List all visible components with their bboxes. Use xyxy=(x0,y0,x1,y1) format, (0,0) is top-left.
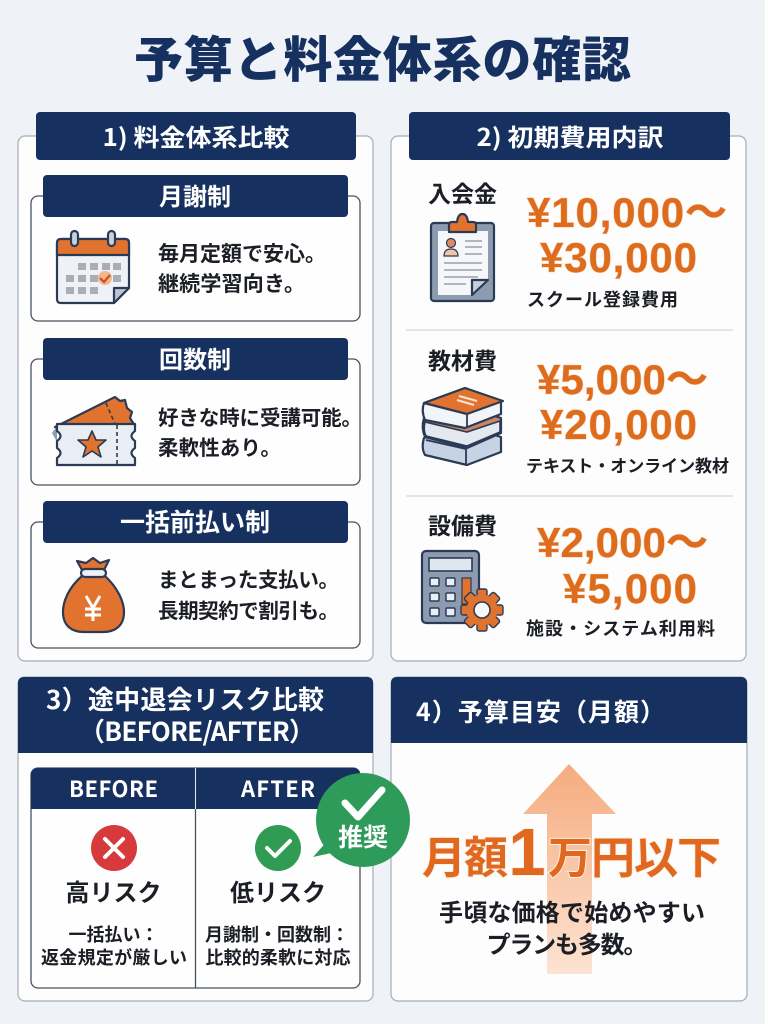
text: monthly description: 毎月定額で安心。 xyxy=(158,238,326,268)
heading: pricing comparison: 1) 料金体系比較 xyxy=(102,118,290,153)
row: equipment fee: 施設・システム利用料 xyxy=(526,615,715,641)
panel: 1 pricing comparison xyxy=(18,112,373,661)
text: per-session description: 柔軟性あり。 xyxy=(158,431,281,461)
callout: under 10,000 yen per month: 月額 xyxy=(422,822,508,886)
heading: monthly budget xyxy=(391,677,747,743)
price: equipment fee: ¥2,000～ xyxy=(537,519,708,566)
card: per-session: 回数制 xyxy=(159,340,231,375)
heading: initial costs xyxy=(409,112,730,160)
price: equipment fee: ¥5,000 xyxy=(563,565,697,612)
text: per-session description xyxy=(158,401,362,461)
panel: 3 cancellation risk xyxy=(18,677,373,1001)
row: enrollment fee: 入会金 xyxy=(428,175,497,209)
column: after: 比較的柔軟に対応 xyxy=(206,944,350,970)
text: budget note: 手頃な価格で始めやすい xyxy=(439,893,705,928)
column: before: 返金規定が厳しい xyxy=(41,944,187,970)
price: enrollment fee xyxy=(527,189,727,281)
price: materials fee xyxy=(537,356,708,448)
row: materials fee: テキスト・オンライン教材 xyxy=(526,452,729,477)
heading: cancellation risk xyxy=(18,677,373,753)
price: materials fee: ¥20,000 xyxy=(540,401,697,448)
heading: cancellation risk: （BEFORE/AFTER） xyxy=(79,712,315,749)
callout: under 10,000 yen per month: 万円以下 xyxy=(548,822,721,886)
heading: cancellation risk: 3）途中退会リスク比較 xyxy=(46,680,324,717)
price: enrollment fee: ¥30,000 xyxy=(540,234,697,281)
card: lump-sum: 一括前払い制 xyxy=(120,503,270,539)
icon: books xyxy=(423,388,503,465)
row: enrollment fee xyxy=(428,175,727,312)
column: before: 高リスク xyxy=(66,873,162,908)
price: materials fee: ¥5,000～ xyxy=(537,356,708,403)
heading: monthly budget: 4）予算目安（月額） xyxy=(416,693,665,729)
price: enrollment fee: ¥10,000～ xyxy=(527,189,727,236)
text: monthly description: 継続学習向き。 xyxy=(158,268,305,298)
icon: green check xyxy=(255,825,301,871)
callout: under 10,000 yen per month xyxy=(422,815,721,890)
badge: recommended xyxy=(313,773,410,867)
icon: ticket xyxy=(52,397,135,465)
text: per-session description: 好きな時に受講可能。 xyxy=(158,401,362,431)
arrow: upward xyxy=(523,764,616,974)
panel: 4 monthly budget xyxy=(391,677,747,1001)
icon: clipboard xyxy=(431,214,494,301)
price: equipment fee xyxy=(537,519,708,612)
column: after xyxy=(205,772,350,970)
heading: pricing comparison xyxy=(36,112,356,160)
panel: 2 initial costs xyxy=(391,112,746,661)
icon: calculator with gear xyxy=(422,551,503,631)
icon: red cross xyxy=(91,825,137,871)
row: equipment fee: 設備費 xyxy=(428,507,497,541)
text: budget note xyxy=(439,893,705,960)
column: before: BEFORE xyxy=(69,772,158,804)
card: monthly xyxy=(31,175,360,321)
icon: money bag xyxy=(63,558,124,632)
row: materials fee xyxy=(423,342,729,477)
column: before xyxy=(41,772,187,970)
card: lump-sum xyxy=(31,501,360,648)
row: enrollment fee: スクール登録費用 xyxy=(527,286,678,312)
text: lump-sum description: まとまった支払い。 xyxy=(158,563,339,593)
comparison table xyxy=(31,768,360,988)
callout: under 10,000 yen per month: 1 xyxy=(508,815,546,890)
column: before: 一括払い： xyxy=(68,921,158,947)
icon: calendar xyxy=(57,231,129,303)
heading: initial costs: 2) 初期費用内訳 xyxy=(476,118,664,153)
card: per-session xyxy=(31,338,362,485)
column: after: 低リスク xyxy=(230,873,326,908)
text: lump-sum description: 長期契約で割引も。 xyxy=(158,594,339,624)
badge: recommended: 推奨 xyxy=(338,818,388,854)
text: budget note: プランも多数。 xyxy=(486,925,648,960)
column: after: 月謝制・回数制： xyxy=(205,921,349,947)
column: after: AFTER xyxy=(240,772,315,804)
row: materials fee: 教材費 xyxy=(428,342,497,376)
text: monthly description xyxy=(158,238,326,298)
text: lump-sum description xyxy=(158,563,339,624)
row: equipment fee xyxy=(422,507,715,641)
title: 予算と料金体系の確認 xyxy=(134,21,631,92)
card: monthly: 月謝制 xyxy=(159,177,231,212)
